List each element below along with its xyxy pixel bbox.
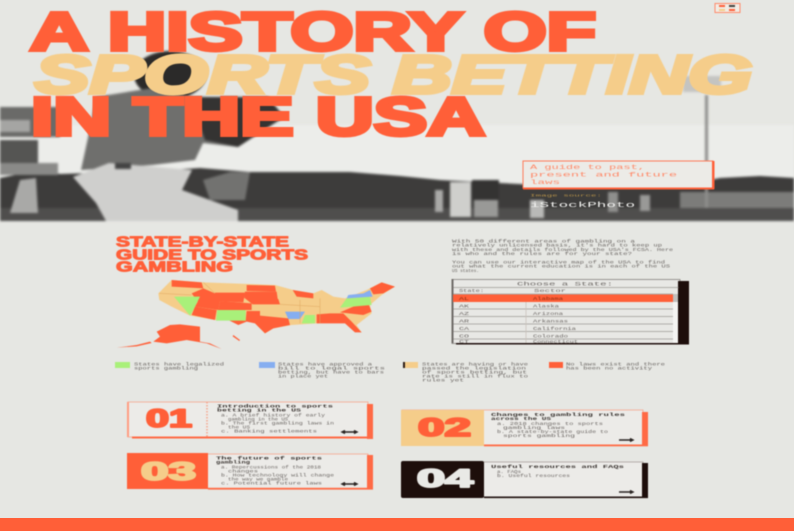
table: choose a state: Arkansas <box>533 318 568 324</box>
card 01: 01 <box>146 405 192 433</box>
card 01: betting in the US <box>217 408 301 414</box>
legend: pending: passed the legislation <box>422 366 527 372</box>
photo credit <box>530 194 636 210</box>
card 04: Useful resources and FAQs <box>491 464 624 470</box>
callout: guide subtitle: A guide to past, <box>530 164 645 171</box>
intro paragraphs: out what the current education is in each of the US <box>452 264 670 270</box>
card 02: b. A state-by-state guide to <box>497 429 608 435</box>
card 01: the US <box>228 424 250 430</box>
card 02: Changes to gambling rules <box>491 412 625 418</box>
legend: approved: States have approved a <box>278 362 372 368</box>
card 03: gambling <box>216 460 250 466</box>
callout: guide subtitle: present and future <box>530 172 678 178</box>
intro paragraphs: relatively unlicensed basis, it's hard to keep up <box>452 243 662 249</box>
table: choose a state: Arizona <box>533 311 563 317</box>
card 01: a. A brief history of early <box>221 412 325 418</box>
table: choose a state: AZ <box>459 311 470 317</box>
card 01 <box>127 402 373 439</box>
legend: no laws <box>549 362 665 372</box>
legend: approved: betting, but have to bars <box>278 370 384 376</box>
icon: arrow <box>619 490 633 494</box>
icon: arrow <box>619 438 633 442</box>
card 04: 04 <box>417 465 473 493</box>
title <box>30 2 752 147</box>
card 03: the way we gamble <box>228 476 288 482</box>
card 03: c. Potential future laws <box>221 480 322 486</box>
legend: pending: rules yet <box>422 378 465 384</box>
footer bar <box>0 518 794 531</box>
card 02: a. 2018 changes to sports <box>497 421 603 427</box>
legend: pending: States are having or have <box>422 362 528 368</box>
heading: state guide: STATE-BY-STATE <box>116 234 289 250</box>
legend: legalized: sports gambling <box>134 366 198 372</box>
legend: pending: of sports betting, but <box>422 370 528 376</box>
intro paragraphs: You can use our interactive map of the USA to find <box>452 260 665 266</box>
card 01: b. The first gambling laws in <box>221 420 334 426</box>
photo credit: iStockPhoto <box>530 202 636 210</box>
heading: state guide: GAMBLING <box>116 260 233 276</box>
card 02: across the US <box>491 416 551 422</box>
callout: guide subtitle <box>523 161 714 190</box>
card 01: c. Banking settlements <box>221 428 317 434</box>
table: choose a state: State: <box>459 288 484 294</box>
card 04: a. FAQs <box>497 469 521 475</box>
table: choose a state: CT <box>459 339 470 345</box>
callout: guide subtitle: laws <box>530 179 561 186</box>
intro paragraphs <box>452 238 673 274</box>
table: choose a state: CA <box>459 326 470 332</box>
card 03: The future of sports <box>216 456 322 462</box>
legend: no laws: No laws exist and there <box>566 362 665 368</box>
title: IN THE USA <box>31 87 485 147</box>
table: choose a state: Choose a State: <box>517 282 613 288</box>
map of the USA by legal status <box>117 280 395 349</box>
icon: arrow <box>342 482 357 486</box>
legend: no laws: has been no activity <box>566 366 652 372</box>
icon: top right menu <box>715 4 740 12</box>
card 02 <box>401 410 648 446</box>
hero photo: baseball player on field <box>0 51 794 221</box>
title: SPORTS BETTING <box>35 45 752 105</box>
legend: legalized: States have legalized <box>134 362 224 368</box>
table: choose a state: AK <box>459 304 470 310</box>
card 03: 03 <box>141 458 196 486</box>
legend: approved: in place yet <box>278 374 328 380</box>
intro paragraphs: US states. <box>452 268 479 274</box>
title: A HISTORY OF <box>30 2 596 62</box>
table: choose a state: Connecticut <box>533 339 578 345</box>
legend: approved: bill to legal sports <box>278 366 386 372</box>
table: choose a state: Colorado <box>533 334 568 340</box>
card 01: Introduction to sports <box>217 404 333 410</box>
card 03 <box>127 453 373 490</box>
card 04: b. Useful resources <box>497 473 570 479</box>
intro paragraphs: With 50 different areas of gambling on a <box>452 238 635 244</box>
legend: pending <box>403 362 528 384</box>
card 03: changes <box>228 468 258 474</box>
table: choose a state: Alabama <box>533 296 563 302</box>
legend: approved <box>259 362 386 380</box>
card 04 <box>401 461 648 498</box>
legend: pending: rate is still in flux to <box>422 374 528 380</box>
table: choose a state: California <box>533 326 576 332</box>
heading: state guide: GUIDE TO SPORTS <box>116 248 308 264</box>
table: choose a state: CO <box>459 334 470 340</box>
card 02: gambling laws <box>503 425 566 431</box>
card 02: 02 <box>418 414 471 442</box>
card 03: b. How technology will change <box>221 472 334 478</box>
intro paragraphs: with these and details followed by the USA's FCSA. Here <box>452 247 673 253</box>
heading: state guide <box>116 234 308 276</box>
card 01: gambling in the US <box>228 416 288 422</box>
photo credit: Image source: <box>530 194 602 198</box>
icon: arrow <box>342 430 357 434</box>
card 02: sports gambling <box>503 433 576 439</box>
legend: legalized <box>115 362 224 372</box>
intro paragraphs: is who and the rules are for your state? <box>452 251 632 257</box>
card 03: a. Repercussions of the 2018 <box>221 464 321 470</box>
table: choose a state: AL <box>459 296 470 302</box>
table: choose a state <box>452 279 689 345</box>
table: choose a state: Alaska <box>533 304 559 310</box>
table: choose a state: AR <box>459 318 470 324</box>
table: choose a state: Sector <box>534 288 567 294</box>
